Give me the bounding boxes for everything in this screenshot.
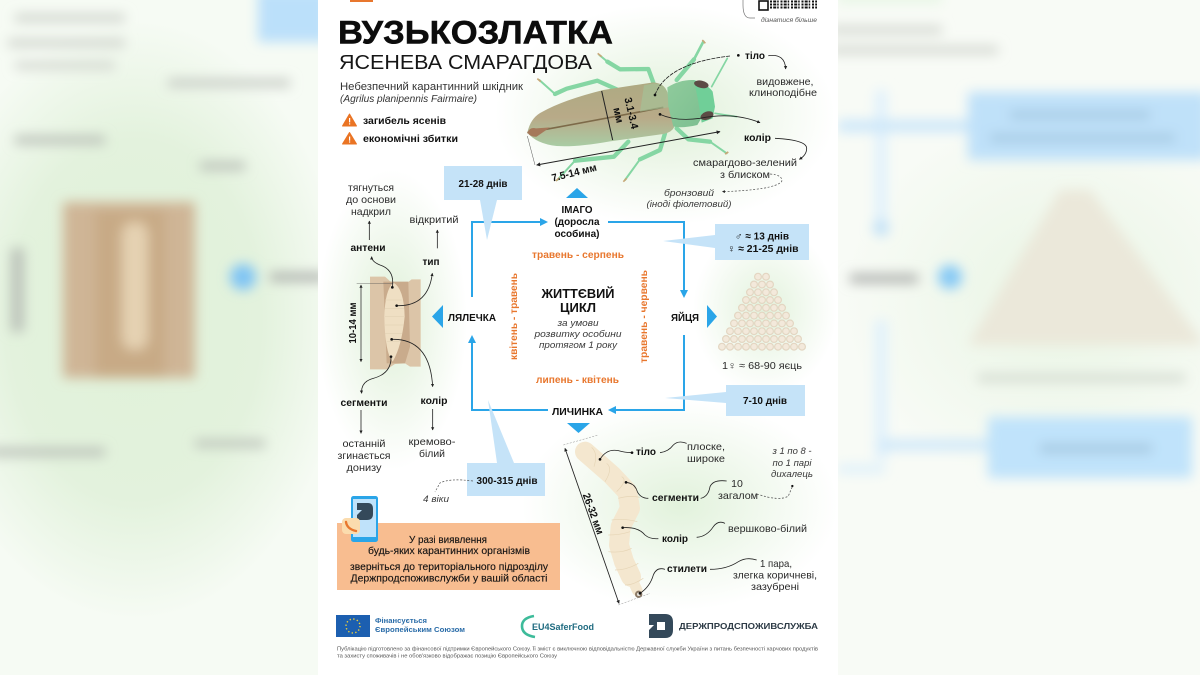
beetle elytra (527, 82, 674, 146)
disclaimer (337, 646, 818, 660)
beetle dimension labels (551, 96, 640, 184)
larva labels and pointers: по 1 парі (772, 458, 812, 469)
callout: adult lifespan (663, 224, 809, 260)
illustration: egg pile (722, 277, 802, 347)
illustration: larva (563, 435, 650, 605)
stage: adult: ІМАГО (562, 204, 592, 216)
center text: life cycle (533, 286, 622, 351)
illustration: emerald ash borer beetle (527, 40, 737, 182)
stage: adult: (доросла (554, 216, 600, 228)
pupa labels and pointers: кремово- (408, 436, 456, 448)
stage: adult (554, 188, 600, 240)
pupa body (384, 283, 405, 362)
larva labels and pointers: злегка коричневі, (733, 570, 817, 582)
stage: eggs (671, 305, 717, 328)
pupa labels and pointers: донизу (346, 462, 382, 474)
pupa labels and pointers: надкрил (351, 206, 391, 218)
contact callout: зверніться до територіального підрозділу (350, 561, 549, 573)
pupa labels and pointers: згинається (338, 450, 390, 462)
pupa labels and pointers: відкритий (410, 214, 459, 226)
stage: larva: ЛИЧИНКА (552, 406, 603, 418)
logo: EU funding: Європейським Союзом (375, 625, 465, 634)
larva labels and pointers: колір (662, 533, 688, 545)
callout: 7-10 days (665, 385, 805, 416)
subtitle: (Agrilus planipennis Fairmaire) (340, 94, 477, 105)
note: 4 instars (423, 480, 473, 505)
callout: 300-315 days: 300-315 днів (476, 475, 538, 487)
wood (370, 277, 421, 369)
dimension: beetle width (602, 91, 613, 140)
beetle pronotum (667, 80, 702, 127)
dimension: beetle length (537, 132, 720, 165)
larva labels and pointers: стилети (667, 563, 707, 575)
beetle dimension labels: 7.5-14 мм (551, 162, 598, 184)
beetle callouts: (іноді фіолетовий) (646, 199, 732, 210)
larva dimension line (565, 448, 619, 603)
larva labels and pointers: загалом (718, 490, 758, 502)
beetle callouts: бронзовий (664, 188, 715, 199)
beetle dimension labels: 3.1-3.4 (621, 96, 640, 130)
beetle tarsi (537, 40, 728, 182)
larva mandibles (635, 591, 642, 598)
larva body (585, 452, 631, 577)
title: ЯСЕНЕВА СМАРАГДОВА (339, 51, 592, 74)
contact callout: Держпродспоживслужби у вашій області (350, 572, 548, 584)
contact callout (337, 523, 560, 590)
center text: life cycle: розвитку особини (533, 329, 622, 340)
green glow behind eggs (693, 225, 837, 395)
QR code block: дізнатися більше (761, 16, 817, 24)
green glow behind larva (522, 400, 838, 610)
stage: larva (552, 406, 603, 433)
pupa labels and pointers: антени (350, 242, 386, 254)
subtitle: Небезпечний карантинний шкідник (340, 81, 523, 93)
pupa labels and pointers: до основи (346, 194, 396, 206)
beetle callouts (646, 50, 817, 210)
pupa labels and pointers: останній (342, 438, 386, 450)
icon: phone with logo (342, 496, 378, 542)
warnings list: загибель ясенів (363, 115, 447, 127)
beetle head (694, 80, 715, 123)
pupa labels and pointers: тип (422, 256, 440, 268)
larva labels and pointers: 1 пара, (760, 558, 792, 570)
logo: EU funding: Фінансується (375, 616, 427, 625)
callout: adult lifespan: ♀ ≈ 21-25 днів (728, 243, 799, 255)
stage: pupa (432, 305, 496, 328)
season labels: квітень - травень (508, 272, 520, 360)
beetle legs (539, 42, 737, 180)
larva labels and pointers: зазубрені (751, 581, 799, 593)
larva labels and pointers: широке (687, 453, 725, 465)
egg count: 1♀ ≈ 68-90 яєць (722, 360, 803, 372)
disclaimer: Публікацію підготовлено за фінансової підтримки Європейського Союзу. Її зміст є виключною відповідальністю Державної служби України з питань безпечності харчових продуктів (337, 646, 818, 652)
pupa labels and pointers: колір (420, 395, 448, 407)
contact callout: будь-яких карантинних організмів (368, 545, 530, 557)
warnings list: економічні збитки (363, 133, 458, 145)
larva labels and pointers: тіло (636, 446, 656, 458)
center text: life cycle: ЦИКЛ (560, 300, 596, 315)
icon: warning triangle (342, 114, 356, 126)
warnings list (342, 114, 458, 145)
beetle callouts: клиноподібне (749, 87, 817, 99)
top accent tab (350, 0, 373, 2)
illustration: pupa in wood (357, 277, 421, 369)
beetle callouts: тіло (745, 50, 765, 62)
stage: adult: особина) (554, 228, 600, 240)
pupa labels and pointers: сегменти (340, 397, 388, 409)
central infographic panel (317, 0, 838, 675)
QR code block (743, 0, 817, 24)
logo: EU4SaferFood: EU4SaferFood (532, 622, 594, 632)
larva labels and pointers: вершково-білий (728, 523, 807, 535)
callout: adult lifespan: ♂ ≈ 13 днів (735, 230, 790, 242)
larva labels and pointers (580, 441, 817, 595)
larva labels and pointers: з 1 по 8 - (772, 446, 812, 457)
larva labels and pointers: 26-32 мм (580, 492, 606, 536)
center text: life cycle: ЖИТТЄВИЙ (541, 286, 614, 301)
beetle callouts: смарагдово-зелений (693, 157, 797, 169)
beetle dimension labels: мм (610, 106, 626, 124)
beetle eyes (693, 79, 709, 89)
season labels (508, 249, 650, 386)
disclaimer: та захисту споживачів і не обов'язково відображає позицію Європейського Союзу (337, 652, 558, 660)
pupa dimension line (360, 285, 362, 362)
life cycle loop arrows (468, 218, 688, 414)
note: 4 instars: 4 віки (423, 494, 450, 505)
callout: 21-28 days: 21-28 днів (458, 178, 508, 190)
callout: 21-28 days (444, 166, 522, 240)
blurred background: left side (0, 0, 345, 675)
larva labels and pointers: сегменти (652, 492, 699, 504)
season labels: травень - червень (638, 269, 650, 363)
logo: State Service: ДЕРЖПРОДСПОЖИВСЛУЖБА (679, 621, 818, 631)
logo: EU funding (336, 615, 465, 637)
icon: warning triangle (342, 132, 356, 144)
title (338, 14, 613, 74)
green glow behind pupa (317, 170, 467, 470)
center text: life cycle: за умови (556, 318, 599, 329)
season labels: липень - квітень (536, 374, 620, 386)
blurred background: right side (830, 0, 1200, 675)
beetle callouts: з блиском (720, 169, 770, 181)
larva labels and pointers: 10 (731, 478, 743, 490)
larva segment lines (592, 447, 643, 585)
season labels: травень - серпень (532, 249, 625, 261)
larva labels and pointers: плоске, (687, 441, 725, 453)
contact callout: У разі виявлення (409, 534, 487, 546)
beetle callouts: колір (744, 132, 771, 144)
pupa labels and pointers: тягнуться (348, 182, 394, 194)
callout: 7-10 days: 7-10 днів (743, 395, 788, 407)
logo: State Service (649, 614, 818, 638)
pupa labels and pointers: білий (419, 448, 445, 460)
stage: eggs: ЯЙЦЯ (671, 311, 699, 324)
title: ВУЗЬКОЗЛАТКА (338, 14, 613, 50)
subtitle (340, 81, 523, 105)
larva labels and pointers: дихалець (771, 469, 813, 480)
green glow behind beetle (495, 5, 835, 225)
stage: pupa: ЛЯЛЕЧКА (448, 312, 496, 324)
pupa labels and pointers: 10-14 мм (347, 302, 359, 344)
pupa labels and pointers (338, 182, 459, 474)
callout: 300-315 days (467, 400, 545, 496)
beetle callouts: видовжене, (756, 76, 814, 88)
center text: life cycle: протягом 1 року (539, 340, 618, 351)
logo: EU4SaferFood (522, 616, 594, 637)
